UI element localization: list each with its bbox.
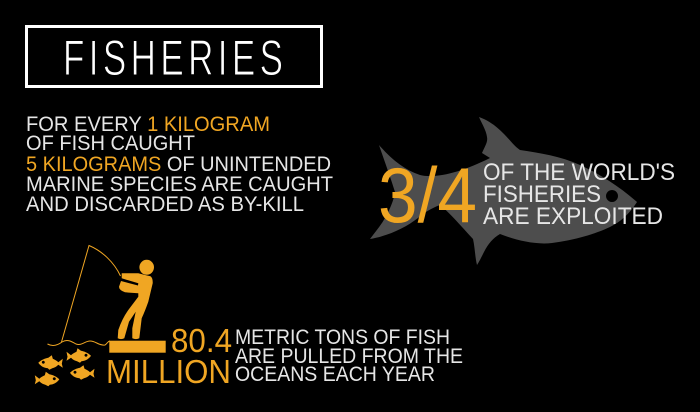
text block: metric tons: OCEANS EACH YEAR	[235, 363, 435, 386]
small fish 2	[66, 348, 91, 363]
small fish 1	[38, 355, 63, 370]
text block: metric tons: ARE PULLED FROM THE	[235, 345, 463, 368]
stat: 3/4: 3/4	[378, 151, 477, 239]
title: Fisheries box: FISHERIES	[63, 31, 287, 87]
stat: 80.4: 80.4	[171, 322, 232, 359]
text block: by-kill statistic: OF FISH CAUGHT	[26, 132, 195, 155]
text block: world's fisheries exploited	[483, 159, 675, 230]
text block: metric tons	[235, 326, 463, 386]
text block: by-kill statistic: FOR EVERY 1 KILOGRAM	[26, 113, 270, 136]
text block: world's fisheries exploited: FISHERIES	[483, 181, 601, 208]
text block: by-kill statistic	[26, 113, 333, 216]
text block: world's fisheries exploited: OF THE WORLD'S	[483, 159, 675, 186]
stat: million: MILLION	[106, 353, 231, 390]
small fish 3	[70, 365, 94, 380]
head	[139, 260, 154, 275]
small fish 4	[35, 372, 59, 386]
icon: large fish silhouette	[370, 117, 637, 265]
text block: by-kill statistic: 5 KILOGRAMS OF UNINTENDED	[26, 153, 331, 176]
text block: by-kill statistic: MARINE SPECIES ARE CAUGHT	[26, 173, 333, 196]
text block: metric tons: METRIC TONS OF FISH	[235, 326, 450, 349]
water line	[48, 341, 110, 345]
text block: by-kill statistic: AND DISCARDED AS BY-KILL	[26, 193, 304, 216]
icon: fisherman with rod, water and fish	[35, 246, 166, 386]
fishing rod and line	[62, 246, 120, 342]
body	[118, 273, 153, 339]
platform	[109, 341, 166, 353]
text block: world's fisheries exploited: ARE EXPLOITED	[483, 203, 663, 230]
